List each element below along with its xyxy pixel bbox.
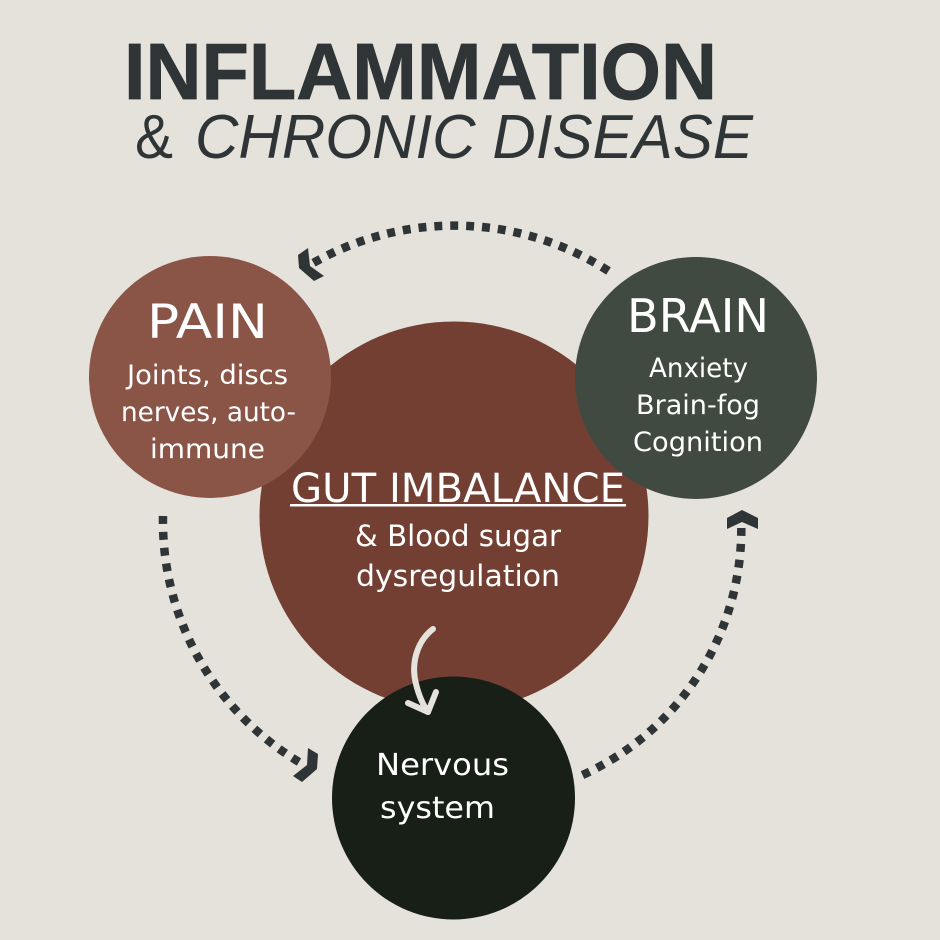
nervous system label: system <box>380 791 495 826</box>
arrow: brain to pain <box>298 226 608 281</box>
arrow: pain to nervous system <box>163 516 318 782</box>
pain details: nerves, auto- <box>121 397 296 428</box>
brain details: Cognition <box>633 427 763 458</box>
panel: pain <box>89 256 331 498</box>
pain details <box>121 360 296 465</box>
heading: inflammation: INFLAMMATION <box>124 27 717 116</box>
panel: gut imbalance <box>260 322 648 710</box>
gut imbalance heading: GUT IMBALANCE <box>291 466 625 512</box>
nervous system label <box>376 748 509 826</box>
brain details <box>633 353 763 458</box>
panel: nervous system <box>332 676 575 920</box>
brain details: Brain-fog <box>636 390 760 421</box>
arrow: nervous system to brain <box>582 510 758 775</box>
nervous system label: Nervous <box>376 748 509 783</box>
panel: brain <box>575 257 817 499</box>
brain details: Anxiety <box>649 353 748 384</box>
title <box>124 27 754 172</box>
pain heading: PAIN <box>147 295 268 350</box>
heading: ampersand: & <box>135 103 173 172</box>
brain heading: BRAIN <box>627 289 769 343</box>
arrow: gut to nervous system <box>408 629 436 712</box>
gut imbalance details: dysregulation <box>356 559 560 593</box>
pain details: Joints, discs <box>125 360 288 391</box>
gut imbalance details: & Blood sugar <box>355 519 561 553</box>
heading: chronic disease: CHRONIC DISEASE <box>195 103 754 172</box>
gut imbalance details <box>355 519 561 593</box>
pain details: immune <box>150 434 265 465</box>
